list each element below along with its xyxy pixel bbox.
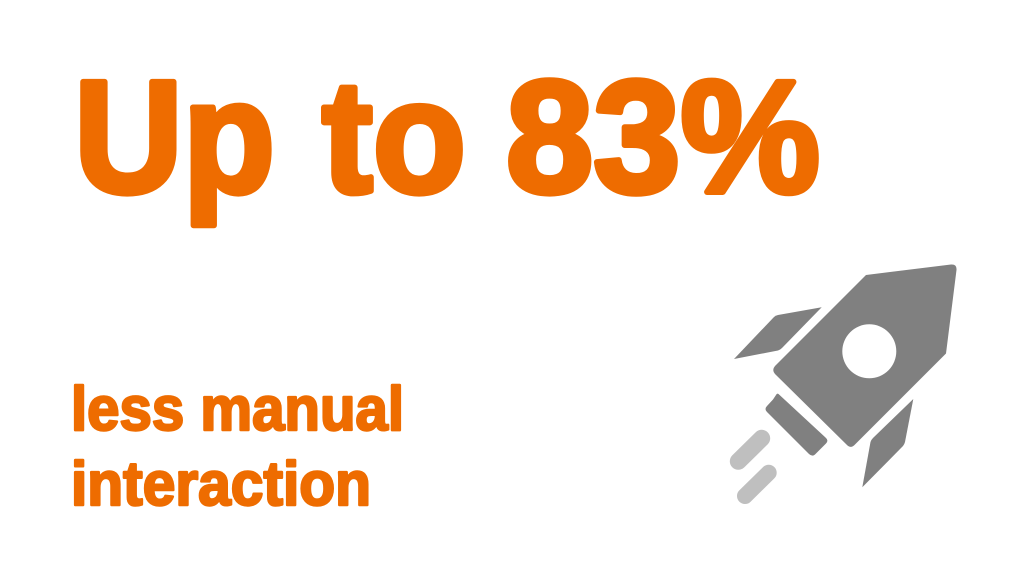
icon: rocket <box>734 264 957 496</box>
text block: less manual interaction <box>71 375 404 519</box>
title: Up to 83%: to <box>322 47 466 226</box>
rocket body <box>773 264 957 447</box>
upper fin <box>734 307 822 359</box>
nozzle <box>766 394 827 456</box>
lower fin <box>862 399 913 487</box>
text block: less manual interaction: interaction <box>71 450 371 519</box>
title: Up to 83%: Up <box>74 47 275 226</box>
exhaust streak lower <box>745 473 769 496</box>
title: Up to 83% <box>74 47 820 226</box>
exhaust streak upper <box>738 438 762 461</box>
text block: less manual interaction: less manual <box>71 375 404 444</box>
title: Up to 83%: 83% <box>506 47 820 226</box>
